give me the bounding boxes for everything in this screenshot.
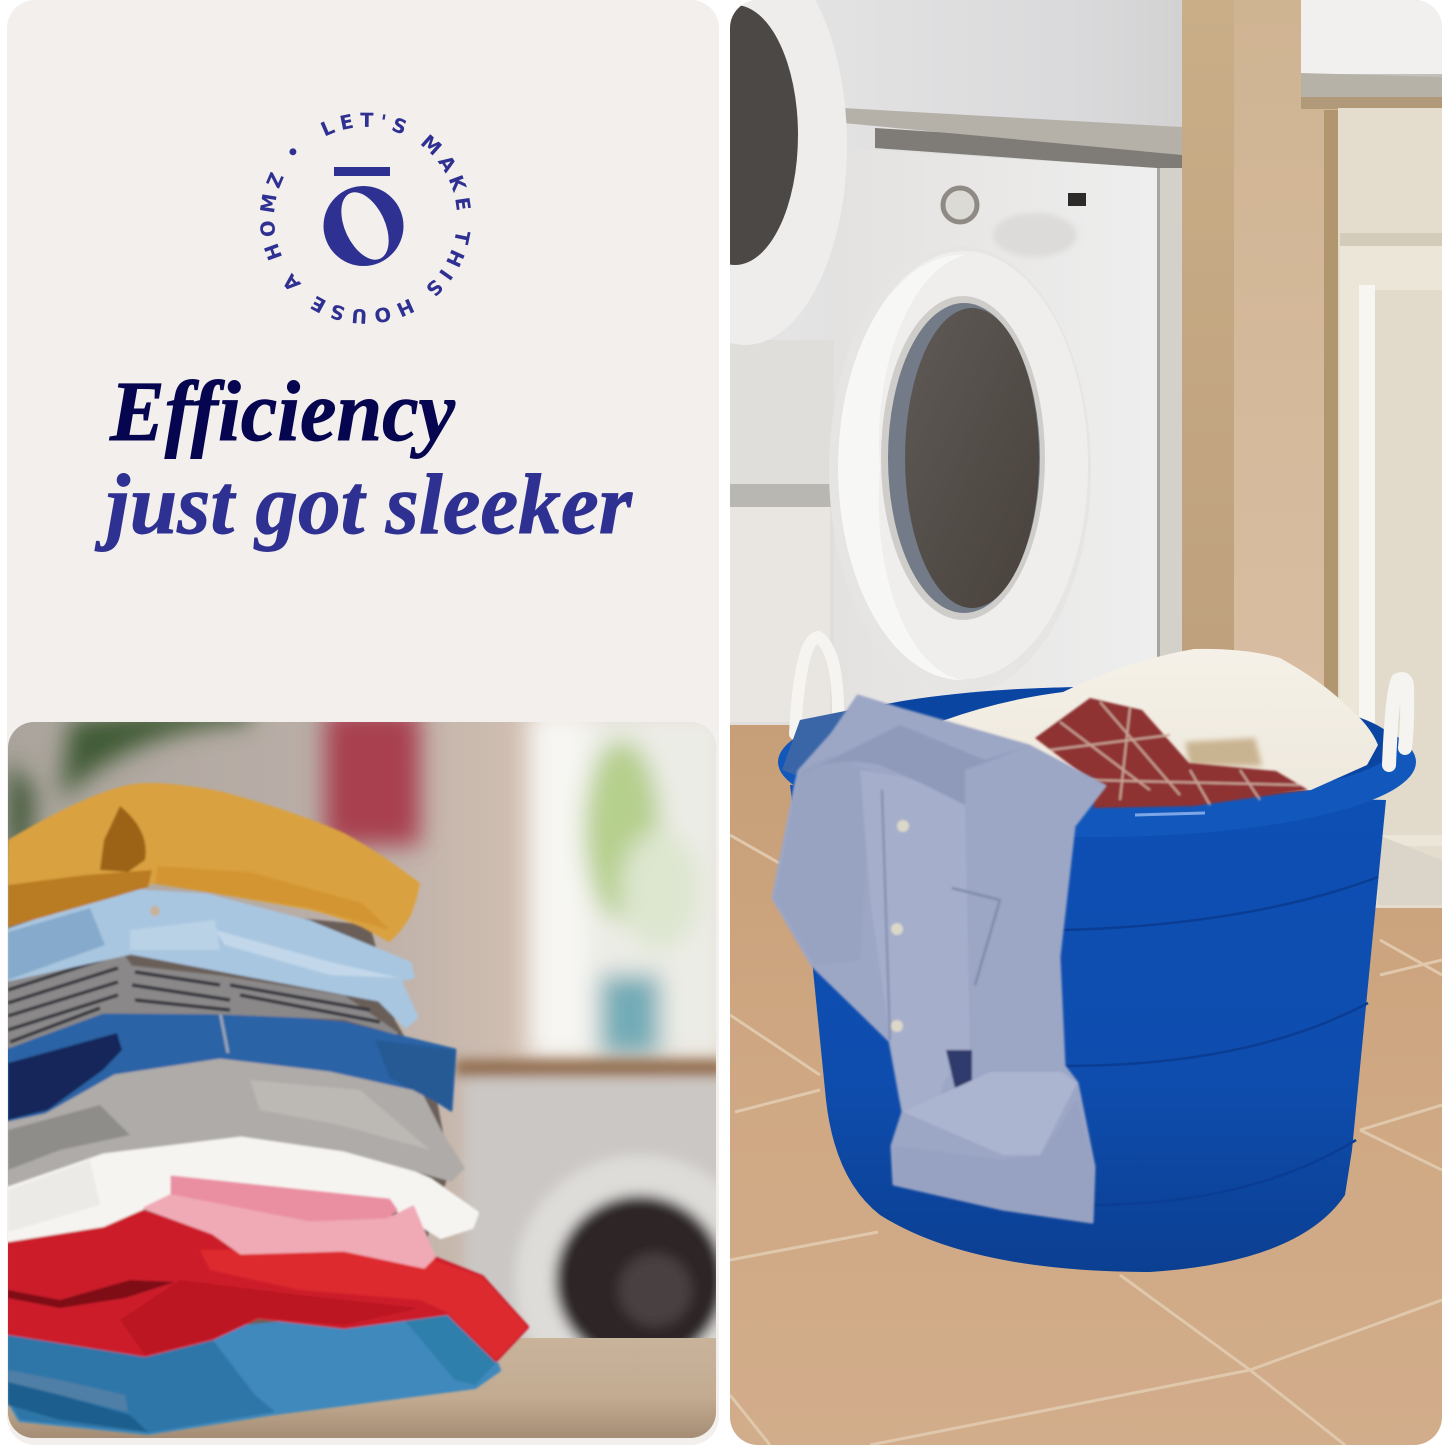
heading line 1: Efficiency <box>109 363 456 459</box>
icon: letter o <box>324 185 404 267</box>
denim garment <box>8 1012 455 1120</box>
blurred laundry room background <box>8 700 765 1438</box>
clothes stack <box>8 783 527 1433</box>
door frame <box>1182 0 1338 700</box>
wooden table <box>8 1338 716 1438</box>
light blue garment <box>8 890 417 1027</box>
grey-blue shirt draped over tub <box>773 696 1105 1222</box>
heading <box>94 363 634 552</box>
washer door <box>829 246 1091 694</box>
washer control buttons <box>993 213 1077 257</box>
pink upper garment <box>172 1177 396 1220</box>
washer dial <box>943 188 977 222</box>
photo: blue laundry tub by washing machine <box>730 0 1442 1445</box>
tiled floor <box>730 715 1442 1445</box>
left rope handle <box>795 637 838 734</box>
red plaid shirt <box>1035 698 1308 808</box>
stack shadow underlay <box>8 918 448 1326</box>
room wall <box>768 0 1442 340</box>
panel: left cream panel <box>7 0 719 1445</box>
washer body <box>730 148 1183 725</box>
shirt buttons <box>891 820 909 1032</box>
shelf <box>843 108 1182 170</box>
blue bottom garment <box>8 1308 499 1433</box>
logo badge <box>260 112 471 324</box>
counter and cabinet <box>1301 0 1442 908</box>
blue tub <box>778 687 1416 1272</box>
red garment <box>8 1210 527 1360</box>
photo: stack of folded clothes <box>8 700 765 1438</box>
mustard garment <box>8 783 420 942</box>
pink lower garment <box>145 1195 434 1267</box>
heading line 2: just got sleeker <box>94 456 634 552</box>
icon: macron bar <box>334 167 390 176</box>
circular slogan: LET'S MAKE THIS HOUSE A HOMZ • <box>260 112 471 324</box>
right rope handle <box>1389 679 1407 765</box>
white towel <box>942 649 1378 800</box>
striped garment <box>8 947 396 1047</box>
white garment <box>8 1128 477 1240</box>
grey garment <box>8 1058 463 1185</box>
upper dryer door <box>730 0 847 345</box>
